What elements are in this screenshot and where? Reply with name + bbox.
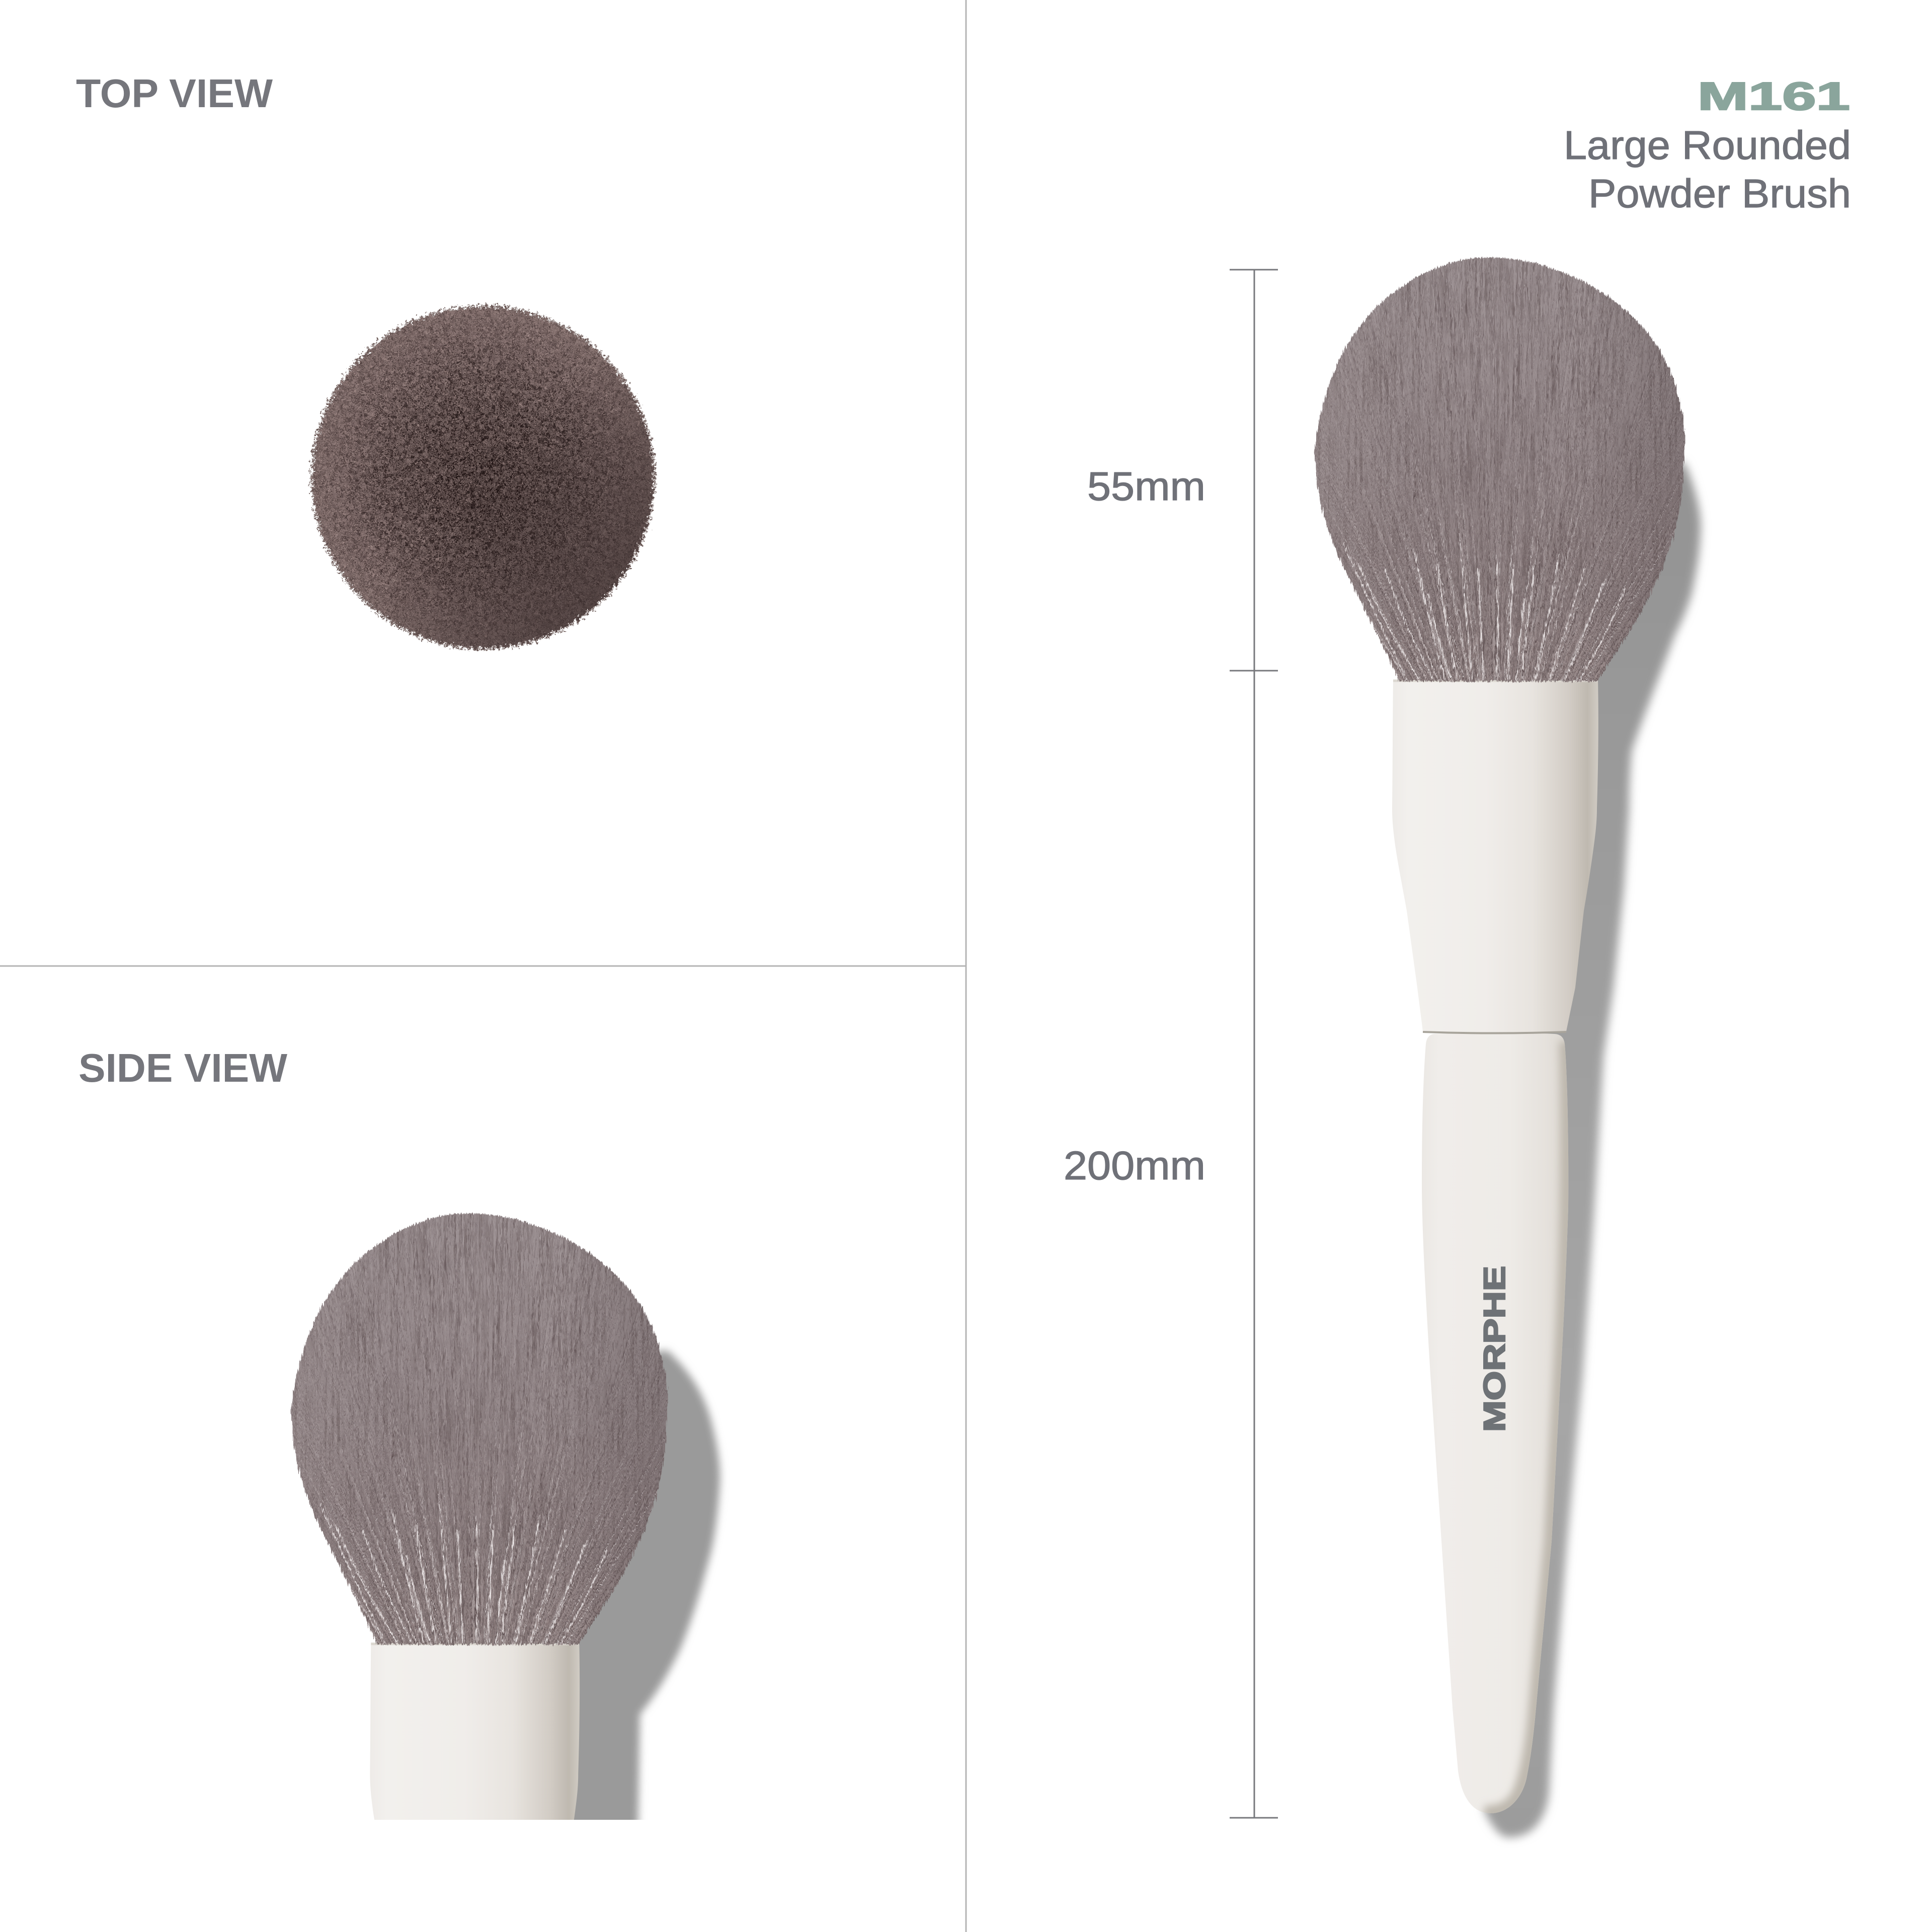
panel: top view (76, 71, 664, 659)
dimension bracket (1230, 270, 1278, 1818)
cast shadow of full brush (1459, 453, 1701, 1837)
dimension label: total length: 200mm (1064, 1143, 1205, 1188)
dimension label: bristle length: 55mm (1087, 464, 1205, 509)
handle (1422, 1032, 1568, 1813)
brand name on handle: MORPHE (1478, 1266, 1511, 1432)
brush bristles seen from above (302, 297, 664, 659)
bristles (1253, 242, 1748, 694)
product name line 2: Powder Brush (1588, 171, 1851, 216)
product name line 1: Large Rounded (1564, 123, 1851, 168)
heading: top view: TOP VIEW (76, 71, 273, 116)
product code: M161 (1698, 74, 1850, 118)
cast shadow of close-up brush (503, 1350, 720, 1831)
panel: full brush dimensions (1064, 74, 1851, 1837)
full brush (1253, 242, 1748, 1837)
close-up bristles and ferrule (228, 1197, 732, 1932)
ferrule (1392, 680, 1598, 1033)
product title block (1564, 74, 1851, 216)
close-up brush with shadow, cropped at the ferrule (228, 1197, 732, 1932)
heading: side view: SIDE VIEW (78, 1045, 287, 1090)
panel: side view (78, 1045, 732, 1932)
